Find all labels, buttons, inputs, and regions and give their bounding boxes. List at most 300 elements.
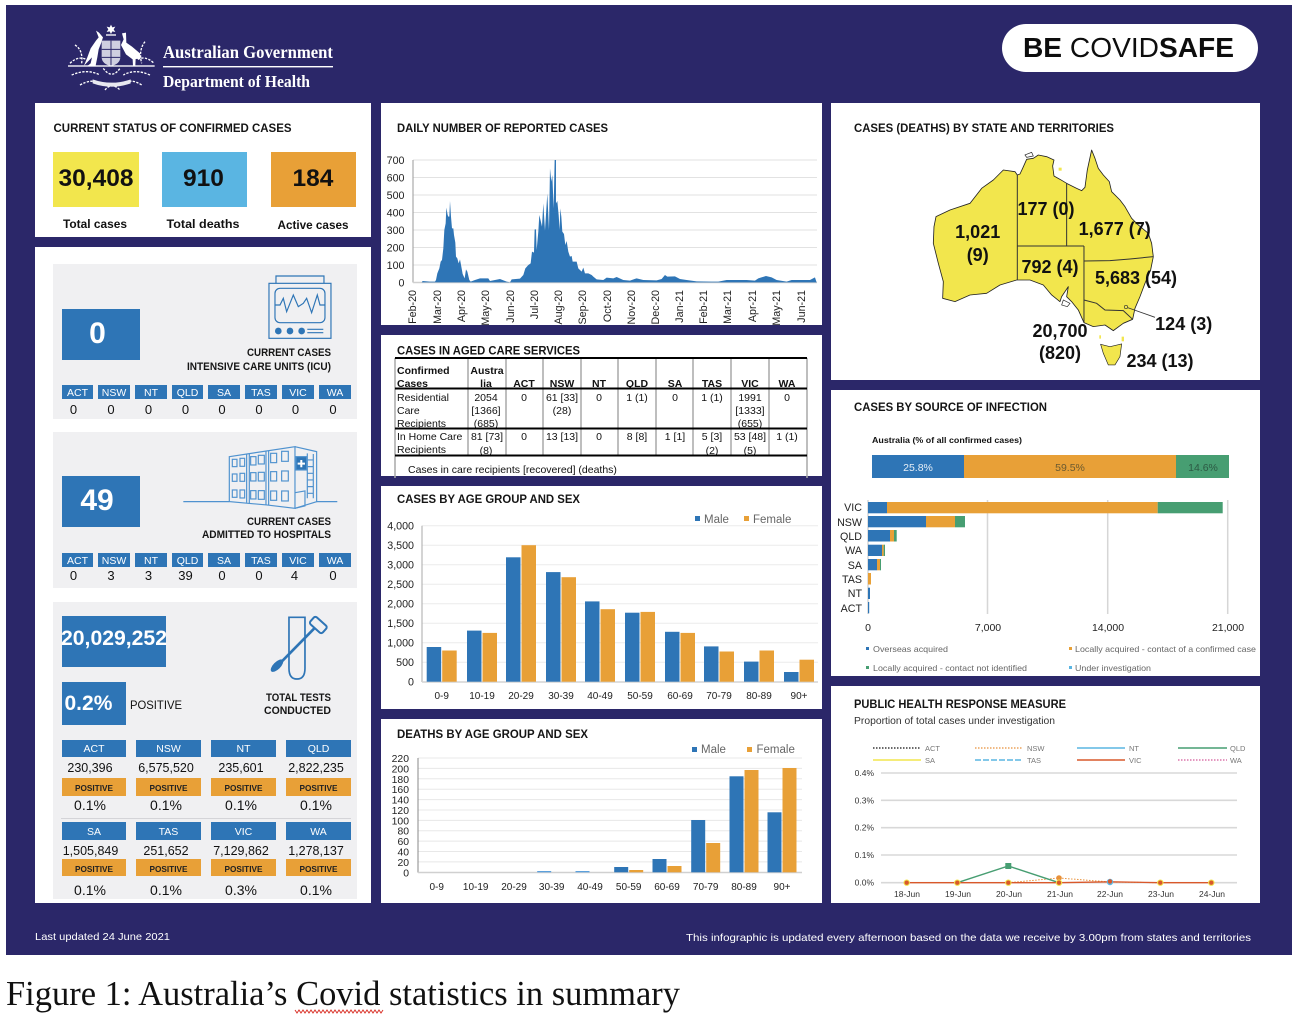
chart: daily cases area: Jun-21 <box>796 290 808 323</box>
figure: hospital count <box>62 476 140 527</box>
state table: tests row two: 0.1% <box>74 882 106 898</box>
x axis labels: 80-89 <box>746 691 772 702</box>
state table: ICU: 0 <box>329 402 337 417</box>
stacked bar: Australia share: Australia (% of all confirmed cases) <box>872 435 1022 445</box>
logo text: Department of Health: Department of Health <box>163 72 310 91</box>
state table: tests row two <box>62 822 351 898</box>
y axis labels: 0.1% <box>855 850 874 860</box>
x axis labels: 18-Jun <box>894 889 920 899</box>
x axis labels: 50-59 <box>627 691 653 702</box>
series: QLD <box>957 866 1059 883</box>
panel: hospital and testing figures <box>35 247 371 903</box>
value axis labels <box>865 622 1244 634</box>
y axis labels: 500 <box>396 657 414 669</box>
state table: hospitals: 0 <box>255 568 263 583</box>
legend: sources: Locally acquired - contact of a confirmed case <box>1075 644 1256 654</box>
female bars <box>442 545 814 682</box>
logo text: Australian Government: Australian Government <box>163 42 333 62</box>
stat: total cases: Total cases <box>63 217 127 231</box>
state table: ICU: ACT <box>67 387 89 399</box>
figure: total tests: 20,029,252 <box>61 627 167 650</box>
table: aged care: 13 [13] <box>546 431 578 443</box>
state table: tests row one: POSITIVE <box>150 783 188 793</box>
figure: percent positive: 0.2% <box>64 692 113 715</box>
state table: tests row one: 0.1% <box>150 797 182 813</box>
table: aged care: 1 (1) <box>701 392 723 404</box>
state table: ICU <box>62 385 351 417</box>
state table: tests row two: 0.1% <box>300 882 332 898</box>
caption: hospitals <box>202 516 331 541</box>
map labels: 20,700 <box>1032 321 1088 341</box>
table: aged care: 0 <box>672 392 678 404</box>
state table: ICU: 0 <box>218 402 226 417</box>
table: aged care: 0 <box>521 392 527 404</box>
legend: sources: Overseas acquired <box>873 644 948 654</box>
state table: hospitals: WA <box>327 555 343 567</box>
state table: ICU: SA <box>217 387 231 399</box>
bar chart: cases by age <box>387 521 818 702</box>
legend: Female <box>753 514 791 526</box>
state table: hospitals: SA <box>217 555 231 567</box>
x axis labels: 20-Jun <box>996 889 1022 899</box>
caption: tests: TOTAL TESTS <box>266 692 331 704</box>
x axis labels: 10-19 <box>469 691 495 702</box>
chart: daily cases area: Nov-20 <box>626 290 638 324</box>
chart: daily cases area: Oct-20 <box>602 290 614 322</box>
legend <box>695 514 791 526</box>
table: aged care: TAS <box>702 378 722 390</box>
state table: ICU: 0 <box>145 402 152 417</box>
y axis labels: 2,000 <box>387 599 414 611</box>
panel: cases by age group and sex <box>381 486 822 709</box>
state table: ICU: TAS <box>251 387 271 399</box>
x axis labels: 19-Jun <box>945 889 971 899</box>
table: aged care: 1991 <box>738 392 762 404</box>
legend: states: SA <box>925 756 935 765</box>
x axis labels: 70-79 <box>706 691 732 702</box>
state table: tests row two: 0.1% <box>150 882 182 898</box>
x axis labels <box>434 691 808 702</box>
panel: current status of confirmed cases <box>35 103 371 237</box>
x axis labels <box>894 889 1225 899</box>
state labels: QLD <box>840 531 862 543</box>
figure: ICU count: 0 <box>89 317 106 350</box>
y axis labels: 3,000 <box>387 560 414 572</box>
state table: hospitals: TAS <box>251 555 271 567</box>
icon: coat of arms <box>68 25 155 90</box>
state table: ICU: 0 <box>182 402 189 417</box>
state table: hospitals: 0 <box>218 568 226 583</box>
bar: ACT <box>868 602 869 613</box>
figure caption: Figure 1: Australia’s Covid statistics in summary <box>6 974 680 1013</box>
state table: ICU: 0 <box>107 402 115 417</box>
chart: daily cases area: 100 <box>387 260 405 272</box>
table: aged care: (28) <box>553 405 571 417</box>
table: aged care: 1 (1) <box>776 431 798 443</box>
x axis labels: 21-Jun <box>1047 889 1073 899</box>
x axis labels: 23-Jun <box>1148 889 1174 899</box>
heading: CASES (DEATHS) BY STATE AND TERRITORIES <box>854 121 1114 135</box>
state table: hospitals: 0 <box>70 568 77 583</box>
chart: daily cases area: Apr-21 <box>747 290 759 322</box>
chart: daily cases area: Jul-20 <box>529 290 541 319</box>
table: aged care: Cases in care recipients [recovered] (deaths) <box>408 464 617 476</box>
chart: daily cases area: Dec-20 <box>650 290 662 324</box>
heading: DEATHS BY AGE GROUP AND SEX <box>397 727 588 741</box>
legend: states: QLD <box>1230 744 1246 753</box>
y axis labels <box>392 754 409 879</box>
value axis labels: 0 <box>865 622 871 634</box>
sub-panel: hospital cases <box>53 432 357 588</box>
legend: states <box>873 744 1246 765</box>
value axis labels: 14,000 <box>1092 622 1124 634</box>
state table: tests row two: 0.3% <box>225 882 257 898</box>
chart: daily cases area: May-21 <box>771 290 783 326</box>
stat: total cases: 30,408 <box>59 165 133 192</box>
state table: tests row one: ACT <box>84 743 105 755</box>
x axis labels: 70-79 <box>693 882 719 893</box>
y axis labels: 200 <box>392 764 409 775</box>
chart: daily cases area: Feb-21 <box>698 290 710 324</box>
table: aged care: [1366] <box>471 405 501 417</box>
y axis labels: 3,500 <box>387 540 414 552</box>
sub-panel: total tests <box>53 602 357 899</box>
y axis labels: 0.4% <box>855 768 874 778</box>
stacked bar: Australia share: 59.5% <box>1055 462 1085 474</box>
state table: tests row one: QLD <box>308 743 330 755</box>
bar chart: deaths by age <box>392 754 802 893</box>
markers <box>904 863 1215 886</box>
heading: CASES IN AGED CARE SERVICES <box>397 344 580 358</box>
stat: active cases: 184 <box>293 165 334 192</box>
legend: sources: Locally acquired - contact not identified <box>873 663 1027 673</box>
map labels: (9) <box>967 245 989 265</box>
state table: ICU: VIC <box>289 387 307 399</box>
y axis labels: 140 <box>392 796 409 807</box>
chart: daily cases area: 400 <box>387 208 405 220</box>
state table: tests row one: NSW <box>156 743 181 755</box>
legend: states: WA <box>1230 756 1242 765</box>
x axis labels: 40-49 <box>587 691 613 702</box>
x axis labels: 90+ <box>774 882 791 893</box>
state table: hospitals: QLD <box>177 555 199 567</box>
y axis labels: 80 <box>397 827 409 838</box>
table: aged care: 1 [1] <box>665 431 685 443</box>
table: aged care: ACT <box>513 378 535 390</box>
map labels: 1,677 (7) <box>1079 219 1151 239</box>
state table: tests row one: NT <box>236 743 251 755</box>
x axis labels: 30-39 <box>548 691 574 702</box>
bar: VIC <box>868 502 1223 513</box>
y axis labels: 20 <box>397 858 409 869</box>
table: aged care: Residential <box>397 392 449 404</box>
caption: hospitals: ADMITTED TO HOSPITALS <box>202 529 331 541</box>
stacked bar: Australia share: 14.6% <box>1188 462 1218 474</box>
state table: tests row one: 0.1% <box>225 797 257 813</box>
x axis labels: 22-Jun <box>1097 889 1123 899</box>
panel: public health response measure <box>831 686 1260 903</box>
stat: total deaths: 910 <box>183 165 224 192</box>
x axis labels: 40-49 <box>577 882 603 893</box>
bar: NSW <box>868 516 965 527</box>
state labels: NSW <box>837 517 863 529</box>
icon: test tube and swab <box>269 616 328 679</box>
bar chart: by state <box>837 500 1244 634</box>
male bars <box>537 776 782 872</box>
state table: tests row two: POSITIVE <box>150 864 188 874</box>
chart: daily cases area: May-20 <box>480 290 492 326</box>
y axis labels: 2,500 <box>387 579 414 591</box>
legend: states: NSW <box>1027 744 1045 753</box>
icon: hospital building <box>183 447 337 508</box>
caption: ICU <box>187 347 331 373</box>
x axis labels: 0-9 <box>429 882 444 893</box>
y axis labels: 4,000 <box>387 521 414 533</box>
table: aged care: 61 [33] <box>546 392 578 404</box>
chart: daily cases area: 0 <box>399 278 405 290</box>
map: Australia <box>933 150 1155 365</box>
state table: tests row two: 1,505,849 <box>63 844 118 858</box>
state table: tests row two: TAS <box>159 826 178 838</box>
legend: Female <box>756 744 795 756</box>
table: aged care: 1 (1) <box>626 392 648 404</box>
mainland <box>933 150 1153 331</box>
state table: hospitals: ACT <box>67 555 89 567</box>
line chart: under investigation <box>855 768 1237 899</box>
state table: tests row two: POSITIVE <box>300 864 338 874</box>
legend <box>692 744 795 756</box>
x axis labels: 90+ <box>791 691 808 702</box>
table: aged care: (8) <box>480 445 492 457</box>
chart: daily cases area <box>387 155 817 326</box>
chart: daily cases area: Jun-20 <box>505 290 517 323</box>
x axis labels: 20-29 <box>501 882 527 893</box>
stat: total cases <box>53 152 139 231</box>
table: aged care: Confirmed <box>397 365 450 377</box>
state table: ICU: 0 <box>255 402 263 417</box>
state table: hospitals: 3 <box>145 568 152 583</box>
y axis labels <box>387 521 414 689</box>
y axis labels: 220 <box>392 754 409 765</box>
chart: daily cases area: Jan-21 <box>674 290 686 323</box>
legend: states: TAS <box>1027 756 1041 765</box>
state table: tests row two: POSITIVE <box>75 864 113 874</box>
caption: hospitals: CURRENT CASES <box>247 516 331 528</box>
footer: last updated: Last updated 24 June 2021 <box>35 931 170 943</box>
table: aged care: (685) <box>474 418 498 430</box>
chart: daily cases area: Sep-20 <box>577 290 589 324</box>
table: aged care: 53 [48] <box>734 431 766 443</box>
chart: daily cases area: Mar-21 <box>722 290 734 324</box>
chart: daily cases area: Aug-20 <box>553 290 565 324</box>
y axis labels: 0.3% <box>855 795 874 805</box>
state table: tests row one: 6,575,520 <box>138 761 194 775</box>
state table: hospitals: VIC <box>289 555 307 567</box>
x axis labels: 20-29 <box>508 691 534 702</box>
panel: cases and deaths by state <box>831 103 1260 380</box>
y axis labels: 120 <box>392 806 409 817</box>
caption: ICU: INTENSIVE CARE UNITS (ICU) <box>187 361 331 373</box>
caption: tests: CONDUCTED <box>264 705 331 717</box>
x axis labels <box>429 882 791 893</box>
x axis labels: 0-9 <box>434 691 449 702</box>
figure: total tests <box>61 616 167 667</box>
chart: daily cases area: 500 <box>387 190 405 202</box>
state table: hospitals: 3 <box>107 568 115 583</box>
x axis labels: 60-69 <box>654 882 680 893</box>
stacked bar: Australia share: 25.8% <box>903 462 933 474</box>
table: aged care: Care <box>397 405 420 417</box>
state table: ICU: QLD <box>177 387 199 399</box>
figure: hospital count: 49 <box>80 484 114 517</box>
footer: update note: This infographic is updated every afternoon based on the data we receive by 3.00pm from states and territories <box>686 932 1251 944</box>
value axis labels: 21,000 <box>1212 622 1244 634</box>
x axis labels: 24-Jun <box>1199 889 1225 899</box>
heading: PUBLIC HEALTH RESPONSE MEASURE <box>854 697 1066 711</box>
y axis labels: 0 <box>408 677 414 689</box>
legend: states: ACT <box>925 744 940 753</box>
state table: hospitals: 39 <box>178 568 193 583</box>
state table: tests row two: 1,278,137 <box>288 844 344 858</box>
figure: percent positive <box>62 682 182 725</box>
state labels: ACT <box>841 603 862 615</box>
table: aged care: 2054 <box>474 392 498 404</box>
state table: hospitals: 4 <box>291 568 298 583</box>
chart: daily cases area: 200 <box>387 242 405 254</box>
Tasmania <box>1101 344 1122 365</box>
chart: daily cases area: Mar-20 <box>432 290 444 324</box>
caption: tests <box>264 692 331 717</box>
bar: TAS <box>868 573 871 584</box>
table: aged care: Austra <box>470 365 504 377</box>
header: Australian Government logo <box>68 25 333 91</box>
table: aged care: In Home Care <box>397 431 463 443</box>
state labels: NT <box>848 588 862 600</box>
table: aged care: lia <box>480 378 492 390</box>
heading: DAILY NUMBER OF REPORTED CASES <box>397 121 608 135</box>
y axis labels: 180 <box>392 775 409 786</box>
table: aged care: WA <box>779 378 796 390</box>
table: aged care: 0 <box>596 392 602 404</box>
chart: daily cases area: 300 <box>387 225 405 237</box>
legend: Male <box>704 514 729 526</box>
y axis labels: 0.2% <box>855 823 874 833</box>
legend: Male <box>701 744 726 756</box>
state table: ICU: WA <box>327 387 343 399</box>
map labels: 792 (4) <box>1021 257 1079 277</box>
y axis labels: 0 <box>403 868 409 879</box>
state table: hospitals: NSW <box>102 555 126 567</box>
panel: daily number of reported cases <box>381 103 822 326</box>
map labels: 1,021 <box>955 222 1000 242</box>
state table: ICU: 0 <box>70 402 77 417</box>
table: aged care: (5) <box>744 445 756 457</box>
legend: sources: Under investigation <box>1075 663 1151 673</box>
y axis labels: 160 <box>392 785 409 796</box>
state labels: VIC <box>844 502 862 514</box>
map labels: 234 (13) <box>1126 351 1194 371</box>
state labels: TAS <box>842 574 862 586</box>
table: aged care: 0 <box>521 431 527 443</box>
state table: tests row two: 251,652 <box>143 844 189 858</box>
state table: hospitals: NT <box>144 555 159 567</box>
bar: QLD <box>868 530 897 542</box>
map labels: 5,683 (54) <box>1095 268 1177 288</box>
map labels: (820) <box>1039 343 1081 363</box>
series: VIC <box>907 881 1211 884</box>
table: aged care: VIC <box>741 378 759 390</box>
panel: cases in aged care services <box>381 335 822 478</box>
heading: CASES BY SOURCE OF INFECTION <box>854 400 1047 414</box>
chart: daily cases area: Apr-20 <box>456 290 468 322</box>
state table: tests row one: 0.1% <box>300 797 332 813</box>
panel: cases by source of infection <box>831 390 1260 676</box>
state table: tests row two: VIC <box>235 826 253 838</box>
table: aged care: 81 [73] <box>471 431 503 443</box>
state table: tests row two: WA <box>310 826 327 838</box>
chart: daily cases area: Feb-20 <box>407 290 419 324</box>
stat: total deaths: Total deaths <box>166 217 240 231</box>
legend: states: VIC <box>1129 756 1142 765</box>
bar: NT <box>868 588 870 599</box>
state table: tests row one: 235,601 <box>218 761 264 775</box>
figure: ICU count <box>62 309 140 360</box>
x axis labels: 50-59 <box>616 882 642 893</box>
x axis labels: 30-39 <box>539 882 565 893</box>
map labels: 124 (3) <box>1155 314 1212 334</box>
y axis labels: 40 <box>397 848 409 858</box>
table: aged care: Recipients <box>397 444 446 456</box>
map labels: 177 (0) <box>1017 199 1075 219</box>
subheading: Proportion of total cases under investigation <box>854 715 1055 727</box>
badge: Be COVIDSAFE <box>1002 24 1258 72</box>
bar: WA <box>868 545 885 556</box>
y axis labels: 0.0% <box>855 878 874 888</box>
heading: CURRENT STATUS OF CONFIRMED CASES <box>54 121 292 135</box>
table: aged care: SA <box>668 378 683 390</box>
state table: hospitals: 0 <box>329 568 337 583</box>
value axis labels: 7,000 <box>975 622 1001 634</box>
state table: tests row one: POSITIVE <box>300 783 338 793</box>
table: aged care: Recipients <box>397 418 446 430</box>
legend: states: NT <box>1129 744 1139 753</box>
figure: percent positive: POSITIVE <box>130 698 182 712</box>
table: aged care <box>395 358 807 478</box>
legend: sources <box>866 644 1256 673</box>
table: aged care: 5 [3] <box>702 431 722 443</box>
state labels: WA <box>845 545 863 557</box>
state table: tests row two: 7,129,862 <box>213 844 269 858</box>
table: aged care: NT <box>592 378 607 390</box>
state table: ICU: 0 <box>292 402 299 417</box>
y axis labels: 60 <box>397 837 409 848</box>
state table: tests row one: 2,822,235 <box>288 761 344 775</box>
state table: tests row one: POSITIVE <box>224 783 263 793</box>
female bars <box>629 768 796 872</box>
table: aged care: (655) <box>738 418 762 430</box>
male bars <box>427 557 798 682</box>
caption: ICU: CURRENT CASES <box>247 347 331 359</box>
state table: ICU: NT <box>144 387 159 399</box>
map labels <box>955 199 1212 371</box>
icon: ICU monitor <box>269 276 331 338</box>
x axis labels: 60-69 <box>667 691 693 702</box>
bar: SA <box>868 559 881 570</box>
state table: tests row two: POSITIVE <box>224 864 263 874</box>
state table: tests row one <box>62 740 351 813</box>
panel: deaths by age group and sex <box>381 719 822 903</box>
stacked bar: Australia share <box>872 435 1229 478</box>
